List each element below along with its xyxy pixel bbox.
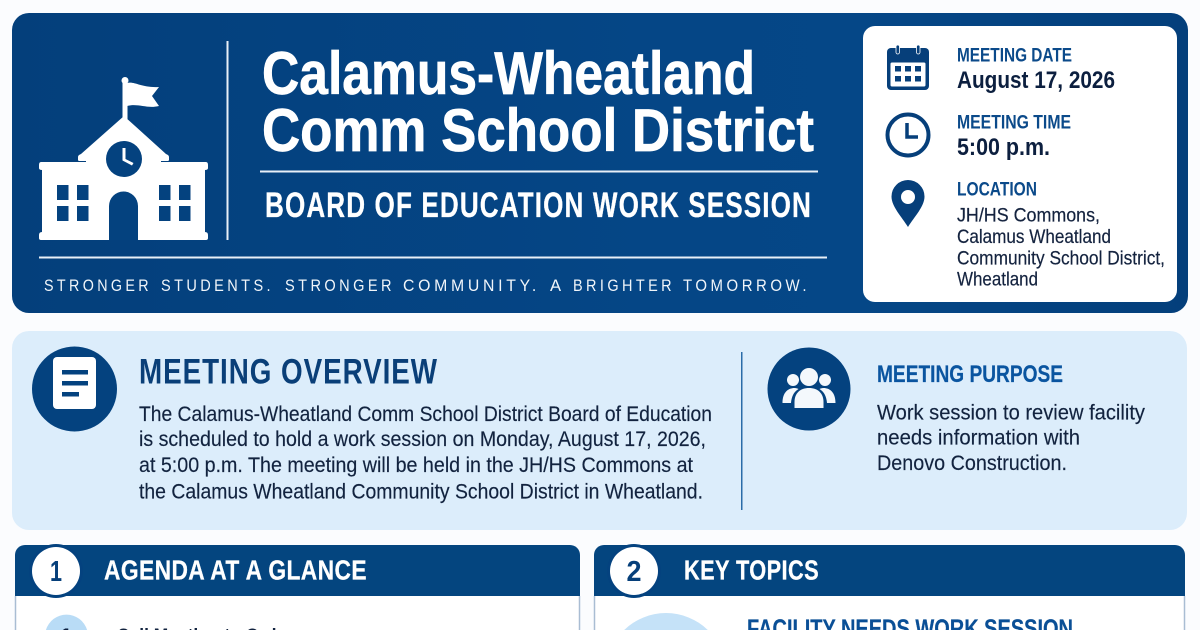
agenda item 1	[46, 615, 294, 630]
number badge 2	[607, 544, 661, 598]
overview text	[139, 403, 712, 504]
location: Community School District,	[957, 248, 1165, 270]
tagline: BRIGHTER	[573, 276, 675, 295]
overview text: the Calamus Wheatland Community School District in Wheatland.	[139, 480, 703, 504]
tagline	[44, 276, 810, 295]
location: LOCATION	[957, 180, 1037, 200]
tagline: TOMORROW.	[683, 276, 810, 295]
heading: key topics: KEY TOPICS	[684, 554, 819, 586]
subtitle: BOARD OF EDUCATION WORK SESSION	[265, 186, 812, 225]
title: Comm School District	[262, 97, 814, 164]
panel: meeting overview	[12, 331, 1187, 530]
location: Calamus Wheatland	[957, 226, 1111, 248]
heading: meeting overview: MEETING OVERVIEW	[139, 352, 438, 392]
meeting date: August 17, 2026	[957, 67, 1115, 94]
purpose text	[877, 402, 1145, 475]
icon: calendar	[887, 45, 929, 90]
tagline: STRONGER	[285, 276, 395, 295]
icon: clock	[888, 114, 928, 156]
panel: agenda at a glance	[15, 544, 580, 630]
meeting time: 5:00 p.m.	[957, 134, 1050, 161]
overview text: is scheduled to hold a work session on Monday, August 17, 2026,	[139, 428, 706, 451]
number badge 1	[29, 544, 83, 598]
heading: agenda: AGENDA AT A GLANCE	[104, 554, 367, 586]
number badge 1: 1	[50, 556, 62, 588]
number badge 2: 2	[626, 556, 642, 588]
title	[262, 40, 814, 164]
icon: location pin	[892, 180, 924, 227]
meeting date	[957, 46, 1115, 94]
meeting time: MEETING TIME	[957, 112, 1071, 134]
topic icon circle	[624, 613, 708, 630]
meeting date: MEETING DATE	[957, 46, 1072, 66]
header banner	[12, 13, 1188, 313]
tagline: A	[550, 276, 565, 295]
location: Wheatland	[957, 268, 1038, 290]
icon: people group	[768, 348, 850, 430]
panel: meeting details	[863, 26, 1177, 302]
tagline: COMMUNITY.	[403, 276, 540, 295]
purpose text: Work session to review facility	[877, 402, 1145, 424]
tagline: STRONGER	[44, 276, 152, 295]
overview text: at 5:00 p.m. The meeting will be held in the JH/HS Commons at	[139, 454, 693, 477]
overview text: The Calamus-Wheatland Comm School District Board of Education	[139, 403, 712, 426]
panel: key topics	[594, 544, 1185, 630]
purpose text: Denovo Construction.	[877, 452, 1067, 475]
location	[957, 180, 1165, 290]
meeting time	[957, 112, 1071, 161]
tagline: STUDENTS.	[161, 276, 274, 295]
heading: meeting purpose: MEETING PURPOSE	[877, 361, 1063, 388]
icon: school building	[39, 77, 208, 240]
purpose text: needs information with	[877, 426, 1080, 450]
title: Calamus-Wheatland	[262, 40, 755, 107]
location: JH/HS Commons,	[957, 204, 1100, 226]
icon: document	[32, 346, 117, 432]
